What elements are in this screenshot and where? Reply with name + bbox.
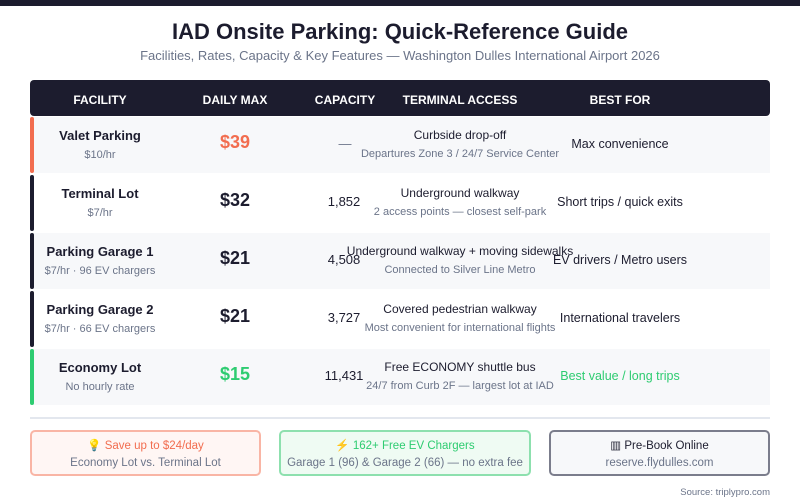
callout: savings: 💡 Save up to $24/day (87, 440, 204, 452)
table header: BEST FOR (590, 93, 650, 107)
table header: FACILITY (73, 93, 127, 107)
callout: EV chargers: Garage 1 (96) & Garage 2 (66) — no extra fee (287, 457, 523, 469)
callout: pre-book (549, 430, 770, 476)
row: valet: Curbside drop-off (414, 128, 506, 142)
source: Source: triplypro.com (680, 487, 770, 498)
row: terminal lot: 1,852 (328, 194, 360, 209)
row: terminal lot: $32 (220, 190, 250, 210)
table header: CAPACITY (315, 93, 375, 107)
row: terminal lot (30, 175, 683, 231)
row: valet: — (338, 136, 352, 151)
row: garage 2: 3,727 (328, 310, 360, 325)
row: terminal lot: 2 access points — closest self-park (374, 206, 546, 218)
row: garage 1: $21 (220, 248, 250, 268)
row: economy (30, 349, 680, 405)
row: garage 1: $7/hr · 96 EV chargers (45, 265, 155, 277)
row: economy: No hourly rate (65, 381, 135, 393)
row: garage 1: Parking Garage 1 (47, 244, 153, 259)
row: valet: Departures Zone 3 / 24/7 Service Center (361, 148, 559, 160)
row: terminal lot: $7/hr (87, 207, 113, 219)
row: garage 2: International travelers (560, 311, 680, 325)
title: IAD Onsite Parking: Quick-Reference Guide (172, 19, 628, 44)
row: economy: Free ECONOMY shuttle bus (384, 360, 536, 374)
row: terminal lot: Underground walkway (401, 186, 519, 200)
row: terminal lot: Terminal Lot (61, 186, 139, 201)
table header: DAILY MAX (203, 93, 267, 107)
row: garage 2: Covered pedestrian walkway (383, 302, 537, 316)
row: economy: 24/7 from Curb 2F — largest lot at IAD (366, 380, 554, 392)
row: economy: $15 (220, 364, 250, 384)
row: garage 2: Most convenient for international flights (365, 322, 555, 334)
row: economy: Best value / long trips (560, 369, 680, 383)
row: valet: Max convenience (571, 137, 669, 151)
row: garage 2: Parking Garage 2 (47, 302, 153, 317)
row: valet: Valet Parking (59, 128, 141, 143)
row: garage 2: $21 (220, 306, 250, 326)
callout: EV chargers (279, 430, 531, 476)
row: economy: Economy Lot (59, 360, 141, 375)
table header (30, 80, 770, 116)
callout: pre-book: ▥ Pre-Book Online (610, 440, 709, 452)
callout: savings (30, 430, 261, 476)
subtitle: Facilities, Rates, Capacity & Key Features — Washington Dulles International Airport 2026 (140, 48, 660, 63)
row: economy: 11,431 (325, 368, 363, 383)
row: terminal lot: Short trips / quick exits (557, 195, 683, 209)
row: garage 1: 4,508 (328, 252, 360, 267)
callout: pre-book: reserve.flydulles.com (605, 457, 714, 469)
row: garage 2 (30, 291, 680, 347)
row: garage 2: $7/hr · 66 EV chargers (45, 323, 155, 335)
callout: EV chargers: ⚡ 162+ Free EV Chargers (335, 440, 475, 452)
callout: savings: Economy Lot vs. Terminal Lot (70, 457, 221, 469)
table header: TERMINAL ACCESS (403, 93, 517, 107)
row: valet: $10/hr (84, 149, 116, 161)
row: garage 1: Connected to Silver Line Metro (384, 264, 536, 276)
row: garage 1 (30, 233, 687, 289)
row: valet (30, 117, 669, 173)
row: garage 1: EV drivers / Metro users (553, 253, 687, 267)
row: garage 1: Underground walkway + moving sidewalks (347, 244, 573, 258)
top bar (0, 0, 800, 6)
row: valet: $39 (220, 132, 250, 152)
